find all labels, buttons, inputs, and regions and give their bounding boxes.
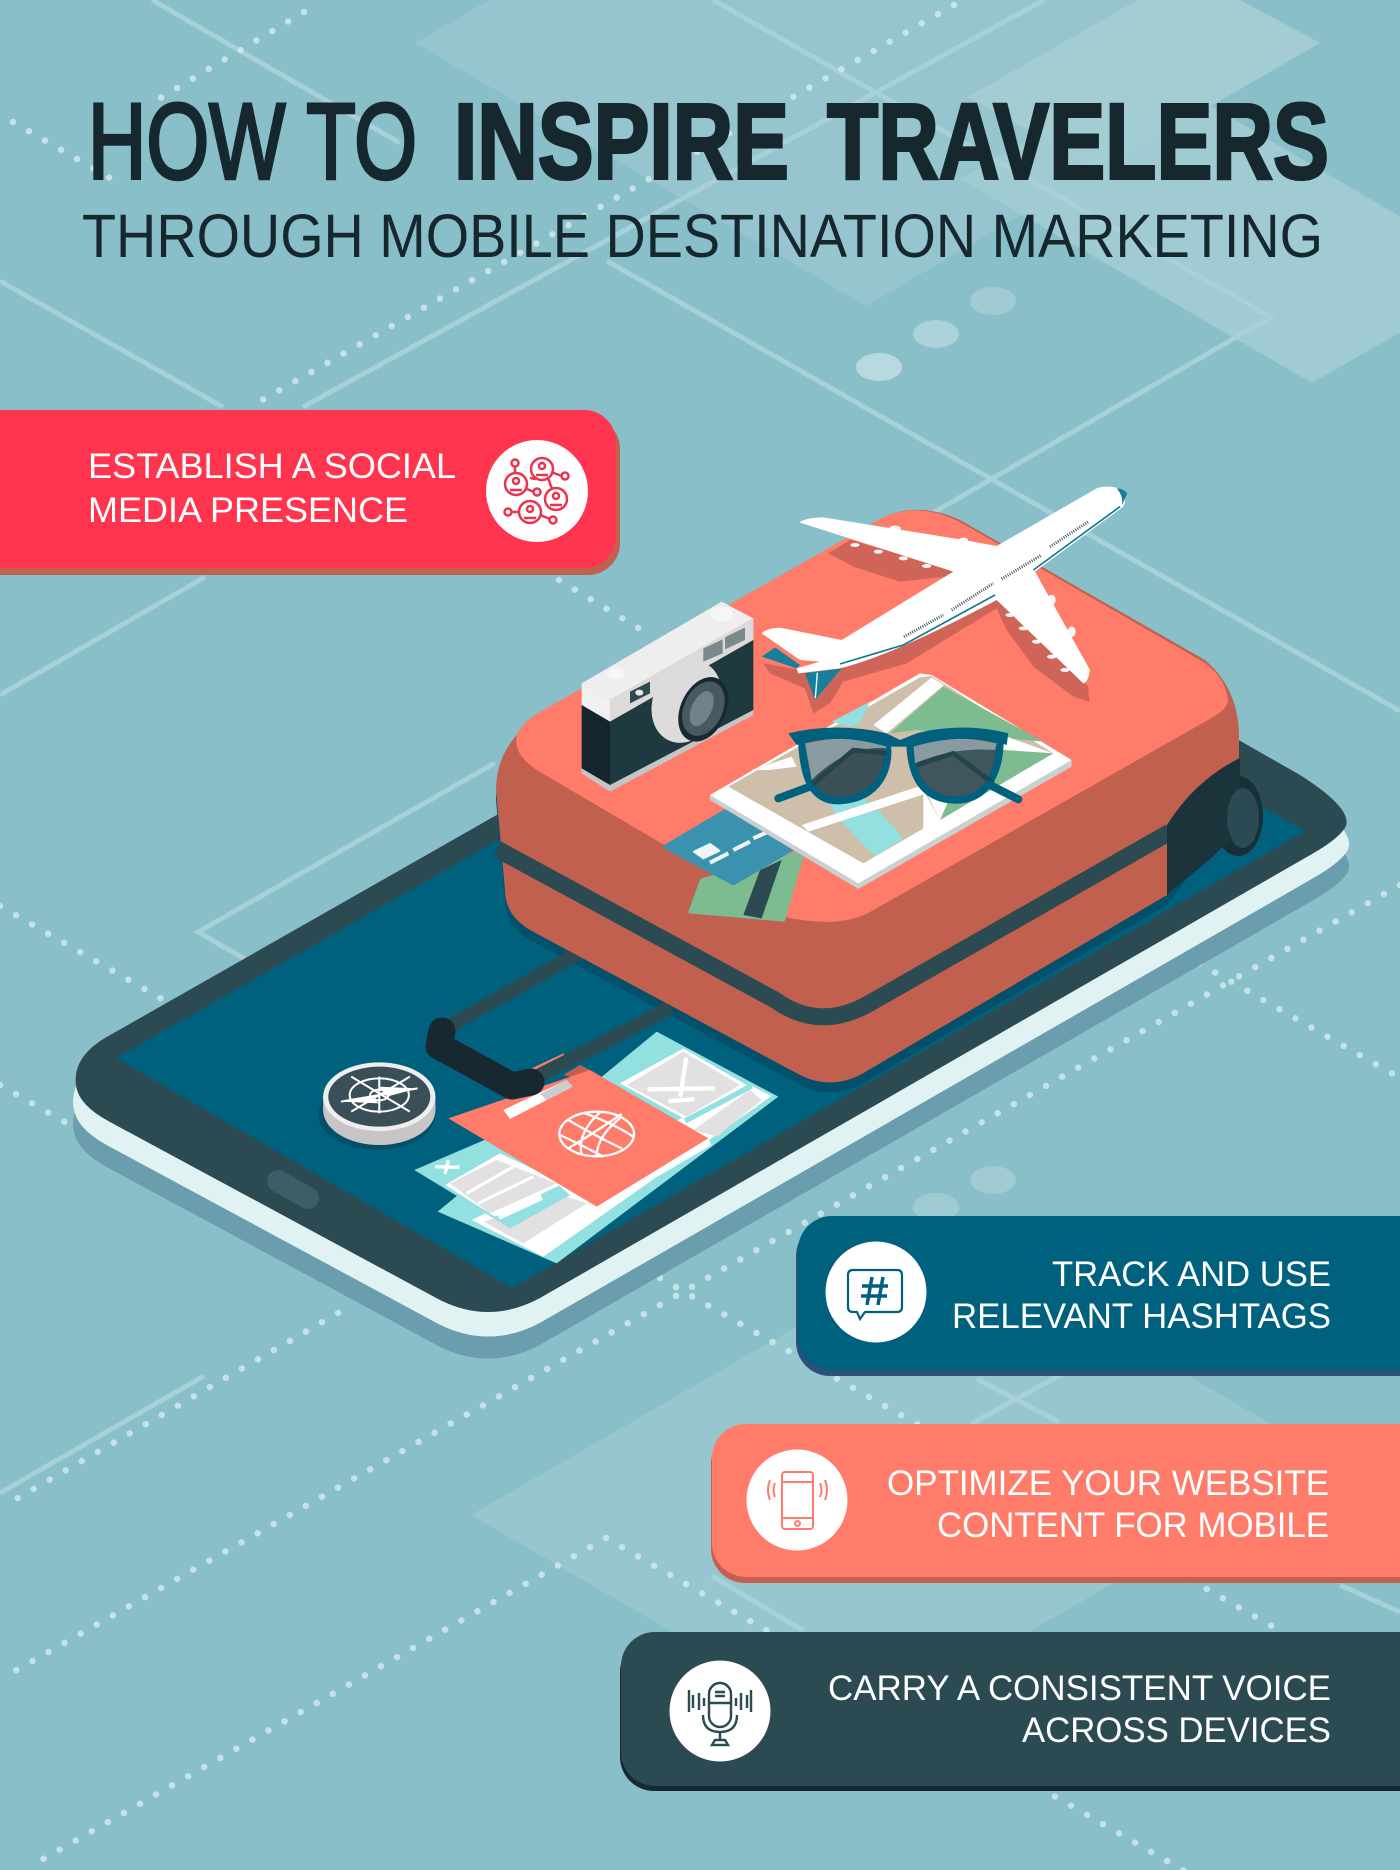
banner: social media <box>0 410 620 575</box>
green card <box>665 808 803 920</box>
banner: hashtags: RELEVANT HASHTAGS <box>952 1297 1331 1336</box>
passport <box>448 1053 712 1210</box>
icon: smartphone <box>768 1472 827 1529</box>
title <box>88 80 1329 202</box>
boarding pass tickets <box>414 1032 778 1263</box>
banner: website <box>711 1424 1400 1583</box>
home button <box>278 1181 308 1198</box>
globe icon <box>559 1112 634 1157</box>
map <box>710 673 1072 889</box>
compass <box>318 1062 435 1150</box>
plane shadow <box>763 540 1089 713</box>
title: INSPIRE <box>454 80 789 202</box>
banner: hashtags <box>796 1216 1400 1376</box>
handle rails <box>448 952 670 1080</box>
banner: voice <box>620 1632 1400 1791</box>
banner: social media: MEDIA PRESENCE <box>88 491 408 530</box>
icon: social network <box>504 458 568 524</box>
banner: social media: ESTABLISH A SOCIAL <box>88 447 456 486</box>
banner: website: CONTENT FOR MOBILE <box>937 1506 1329 1545</box>
wheel <box>1167 758 1263 895</box>
icon: hashtag bubble <box>848 1270 902 1319</box>
phone screen <box>116 605 1305 1288</box>
title: HOW TO <box>88 80 417 202</box>
banner: voice: CARRY A CONSISTENT VOICE <box>828 1669 1331 1708</box>
banner: website: OPTIMIZE YOUR WEBSITE <box>887 1464 1329 1503</box>
camera <box>582 602 753 792</box>
luggage grip <box>439 1031 625 1086</box>
zipper band <box>497 832 1170 1017</box>
subtitle: THROUGH MOBILE DESTINATION MARKETING <box>82 202 1323 270</box>
blue card <box>665 808 793 883</box>
sunglasses <box>778 727 1018 801</box>
suitcase <box>448 510 1263 1092</box>
plane <box>762 487 1127 700</box>
banner: hashtags: TRACK AND USE <box>1052 1255 1331 1294</box>
icon: microphone <box>689 1683 751 1745</box>
ticket plane icon <box>649 1059 713 1101</box>
phone <box>76 566 1347 1356</box>
suitcase lid <box>516 510 1228 922</box>
banner: voice: ACROSS DEVICES <box>1022 1711 1331 1750</box>
